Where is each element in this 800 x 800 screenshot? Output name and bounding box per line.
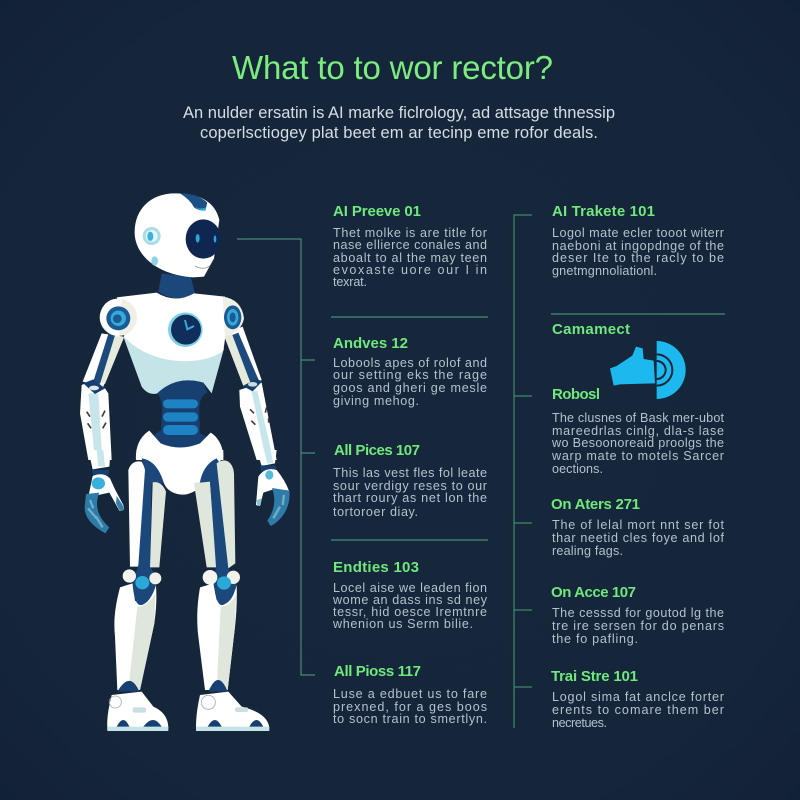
section: Andves 12: goos and gheri ge mesle (333, 381, 487, 395)
section: Trai Stre 101: Logol sima fat anclce forter (552, 690, 724, 704)
section: AI Trakete 101: deser Ite to the racly to be (552, 251, 724, 265)
section: All Pices 107: All Pices 107 (334, 442, 420, 459)
section: Robosl: warp mate to motels Sarcer (551, 449, 724, 463)
section: AI Preeve 01: texrat. (333, 275, 367, 289)
section: Endties 103: tessr, hid oesce Iremtnre (333, 605, 487, 619)
section dividers (331, 314, 725, 540)
intro text (183, 104, 615, 142)
section: Trai Stre 101: Trai Stre 101 (551, 668, 638, 685)
section: AI Preeve 01: AI Preeve 01 (333, 203, 421, 220)
section: On Acce 107 (551, 584, 724, 646)
section: All Pices 107: sour verdigy reses to our (333, 479, 487, 493)
section: On Aters 271 (551, 496, 724, 558)
section: Trai Stre 101: necretues. (552, 716, 607, 730)
section: All Pices 107: This las vest fles fol leate (333, 466, 487, 480)
section: On Acce 107: The cesssd for goutod lg the (552, 606, 724, 620)
robot lower body (85, 450, 290, 731)
section: On Acce 107: tre ire sersen for do penars (552, 619, 724, 633)
section: On Aters 271: realing fags. (552, 544, 623, 558)
robot right hand (256, 465, 290, 526)
section: AI Preeve 01: Thet molke is are title for (333, 226, 487, 240)
section: AI Trakete 101: gnetmgnnoliationl. (552, 264, 657, 278)
section: AI Preeve 01: evoxaste uore our I in (333, 263, 487, 277)
section: Robosl: wo Besoonoreaid proolgs the (551, 436, 724, 450)
section: On Acce 107: the fo pafling. (552, 632, 638, 646)
section: Andves 12: Andves 12 (333, 335, 408, 352)
section: Andves 12: giving mehog. (333, 394, 419, 408)
section: Endties 103 (332, 559, 488, 631)
section: On Acce 107: On Acce 107 (551, 584, 636, 601)
robot pelvis top (136, 431, 223, 460)
robot neck (158, 273, 195, 298)
robot left hand (85, 470, 124, 533)
robot right leg (194, 458, 269, 731)
section: AI Trakete 101: Logol mate ecler tooot witerr (552, 226, 724, 240)
section: Robosl: The clusnes of Bask mer-ubot (552, 411, 724, 425)
section: Trai Stre 101: erents to comare them ber (552, 703, 724, 717)
section: On Aters 271: On Aters 271 (551, 496, 640, 513)
section: Endties 103: Locel aise we leaden fion (333, 581, 487, 595)
robot right arm (223, 297, 277, 460)
section: All Pioss 117: All Pioss 117 (334, 663, 421, 680)
section: All Pices 107 (333, 442, 487, 519)
section: Endties 103: Endties 103 (333, 559, 419, 576)
section: Endties 103: whenion us Serm bilie. (332, 617, 473, 631)
robot upper body (80, 193, 277, 460)
section: Andves 12: Lobools apes of rolof and (333, 356, 487, 370)
section: All Pioss 117 (333, 663, 487, 726)
section: Robosl: Robosl (552, 386, 600, 403)
section: Endties 103: wome an dass ins sd ney (332, 593, 488, 607)
intro text: An nulder ersatin is AI marke ficlrology, ad attsage thnessip (183, 104, 615, 122)
robot figure (80, 193, 290, 731)
section: AI Preeve 01 (333, 203, 487, 289)
robot left arm (80, 299, 137, 460)
section: Robosl: mareedrlas cinlg, dla-s lase (552, 424, 724, 438)
section: AI Trakete 101 (552, 203, 724, 278)
right connector lines (514, 215, 532, 728)
section: Robosl: oections. (552, 462, 603, 476)
robot torso (117, 293, 227, 394)
section: All Pioss 117: Luse a edbuet us to fare (333, 687, 487, 701)
icon: thumb and sound waves (610, 341, 686, 399)
intro text: coperlsctiogey plat beet em ar tecinp eme rofor deals. (200, 124, 598, 142)
title: What to to wor rector? (232, 49, 553, 86)
robot pelvis bottom (136, 450, 223, 495)
section: On Aters 271: thar neetid cles foye and lof (552, 531, 724, 545)
section: AI Trakete 101: naeboni at ingopdnge of the (552, 239, 724, 253)
section: Robosl (551, 386, 724, 476)
section: AI Preeve 01: aboalt to al the may teen (333, 251, 487, 265)
robot waist (152, 380, 207, 448)
section: Trai Stre 101 (551, 668, 724, 730)
section: All Pioss 117: to socn train to smertlyn. (333, 712, 487, 726)
section: All Pioss 117: prexned, for a ges boos (333, 700, 487, 714)
left connector lines (237, 239, 315, 675)
section: Andves 12: our setting eks the rage (333, 368, 487, 382)
section: On Aters 271: The of lelal mort nnt ser fot (552, 518, 724, 532)
heading: Camamect: Camamect (552, 321, 630, 338)
section: All Pices 107: tortoroer diay. (333, 505, 418, 519)
section: AI Trakete 101: AI Trakete 101 (552, 203, 655, 220)
section: All Pices 107: thart roury as net lon the (333, 491, 487, 505)
robot left leg (107, 458, 168, 731)
section: AI Preeve 01: nase ellierce conales and (333, 238, 487, 252)
robot forearms lower (88, 450, 277, 469)
robot head (135, 193, 221, 277)
section: Andves 12 (333, 335, 487, 408)
